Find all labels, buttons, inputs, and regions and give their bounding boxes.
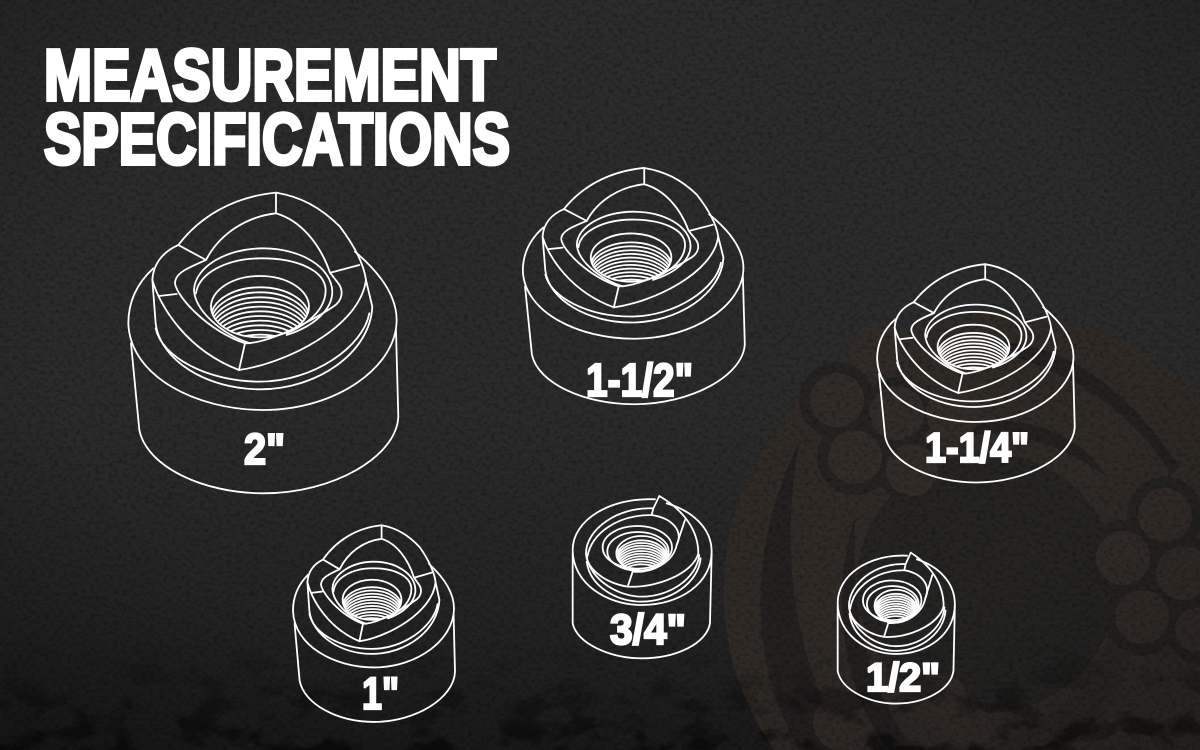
title: SPECIFICATIONS [44,100,510,180]
title: MEASUREMENT [44,36,496,116]
bottom grime [0,680,1200,750]
title [44,36,510,180]
watermark logo [724,314,1200,750]
label: 1/2 inch: 1/2" [866,656,940,700]
punch die: 1 inch [293,525,455,722]
punch die: 2 inch [128,193,398,493]
label: 3/4 inch: 3/4" [610,606,686,654]
punch die: 1-1/4 inch [877,264,1075,482]
punch die: 3/4 inch [573,496,712,658]
label: 2 inch: 2" [244,425,285,474]
label: 1-1/2 inch: 1-1/2" [586,354,693,406]
punch die: 1-1/2 inch [523,168,745,406]
label: 1 inch: 1" [362,668,399,719]
label: 1-1/4 inch: 1-1/4" [925,424,1029,471]
punch die: 1/2 inch [838,553,955,704]
